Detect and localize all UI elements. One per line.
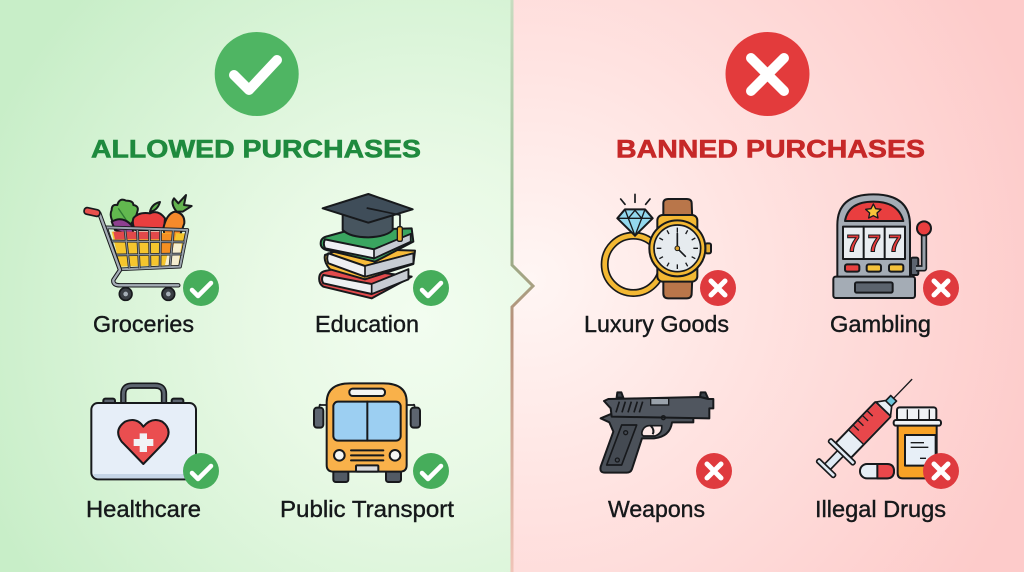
- label: Education: [315, 311, 419, 337]
- item: illegal drugs: [812, 367, 959, 522]
- label: Gambling: [830, 311, 931, 337]
- label: Illegal Drugs: [815, 496, 946, 522]
- icon: shopping cart: [83, 195, 192, 300]
- icon: medical case: [91, 386, 196, 479]
- label: Healthcare: [86, 496, 201, 522]
- icon: slot machine: [833, 194, 931, 298]
- label: Weapons: [608, 496, 705, 522]
- cross badge: [923, 453, 959, 489]
- arrow: chevron divider: [512, 0, 533, 572]
- icon: syringe, pill and bottle: [812, 367, 941, 482]
- check badge: [183, 453, 219, 489]
- icon: pistol: [600, 392, 713, 473]
- item: healthcare: [86, 386, 219, 522]
- icon: allowed check badge: [215, 32, 299, 116]
- heading: allowed purchases: ALLOWED PURCHASES: [91, 136, 421, 164]
- check badge: [413, 453, 449, 489]
- cross badge: [696, 453, 732, 489]
- check badge: [183, 270, 219, 306]
- panel: allowed background: [0, 0, 533, 572]
- panel: banned background: [512, 0, 1024, 572]
- item: weapons: [600, 392, 732, 522]
- icon: banned cross badge: [726, 32, 810, 116]
- item: gambling: [830, 194, 959, 337]
- heading: banned purchases: BANNED PURCHASES: [616, 136, 925, 164]
- icon: slot machine: 7: [868, 231, 881, 258]
- item: groceries: [83, 195, 219, 337]
- check badge: [413, 270, 449, 306]
- cross badge: [923, 270, 959, 306]
- item: public transport: [280, 383, 454, 522]
- cross badge: [700, 270, 736, 306]
- label: Groceries: [93, 311, 194, 337]
- item: education: [315, 194, 449, 337]
- label: Luxury Goods: [584, 311, 729, 337]
- icon: ring and watch: [605, 194, 711, 298]
- icon: bus: [314, 383, 420, 482]
- icon: slot machine: 7: [888, 231, 902, 258]
- icon: books and graduation cap: [319, 194, 415, 298]
- reels: 7: [847, 231, 860, 258]
- item: luxury goods: [584, 194, 736, 337]
- label: Public Transport: [280, 496, 454, 522]
